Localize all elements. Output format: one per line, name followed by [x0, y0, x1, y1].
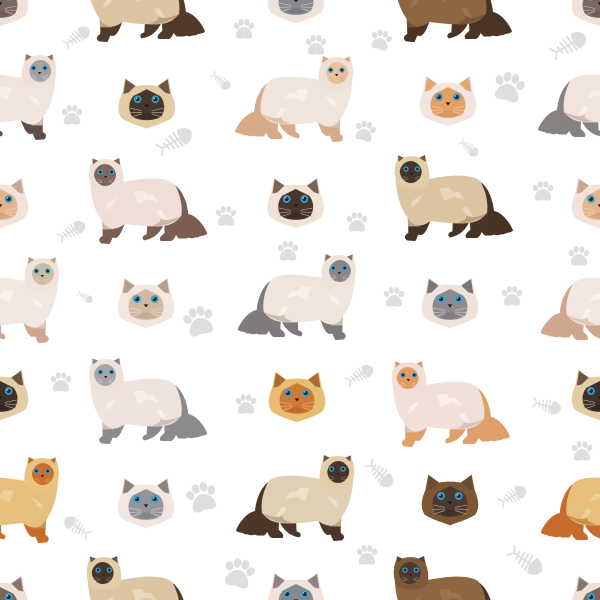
head: cream, right edge [572, 178, 600, 228]
cat: chocolate, bottom right [394, 556, 512, 600]
head: seal on beige, left edge [0, 370, 28, 420]
head: seal on beige [118, 78, 175, 129]
head: seal on cream [267, 178, 324, 228]
head: seal on beige, right edge [572, 370, 600, 420]
cat: blue point, lower left [89, 358, 207, 444]
cat: seal beige, facing right [236, 455, 354, 541]
head: blue point, lower left [118, 478, 174, 528]
cat: seal beige, centre right [395, 155, 513, 241]
head: grey, top centre [268, 0, 324, 23]
head: taupe, top left [0, 0, 28, 26]
head: red point [420, 76, 476, 126]
cat: chocolate, top right [394, 0, 512, 42]
cat: fawn point, left edge [0, 257, 59, 343]
cat: fawn point, right edge [541, 257, 600, 343]
cat: seal point, pale body [89, 158, 207, 244]
head: taupe, top right [572, 0, 600, 26]
head: grey, bottom centre [268, 573, 324, 600]
cat: blue point, left edge [0, 54, 56, 140]
head: taupe, bottom left [0, 576, 28, 600]
head: fawn point [118, 278, 174, 328]
cat: seal beige, top centre [87, 0, 205, 42]
head: solid chocolate [422, 475, 478, 525]
head: taupe, bottom right [572, 576, 600, 600]
head: cream, left edge [0, 178, 28, 228]
head: flame orange [269, 372, 325, 422]
head: lilac point [422, 278, 478, 328]
cat: red point [392, 361, 510, 447]
cat: flame orange, right edge [541, 457, 600, 543]
cat: flame orange, left edge [0, 457, 59, 543]
cat: blue point, centre [238, 254, 356, 340]
cat: blue point, right edge [538, 54, 600, 140]
cat: cream point, facing right [235, 56, 353, 142]
cat: seal beige, bottom centre [87, 556, 205, 600]
